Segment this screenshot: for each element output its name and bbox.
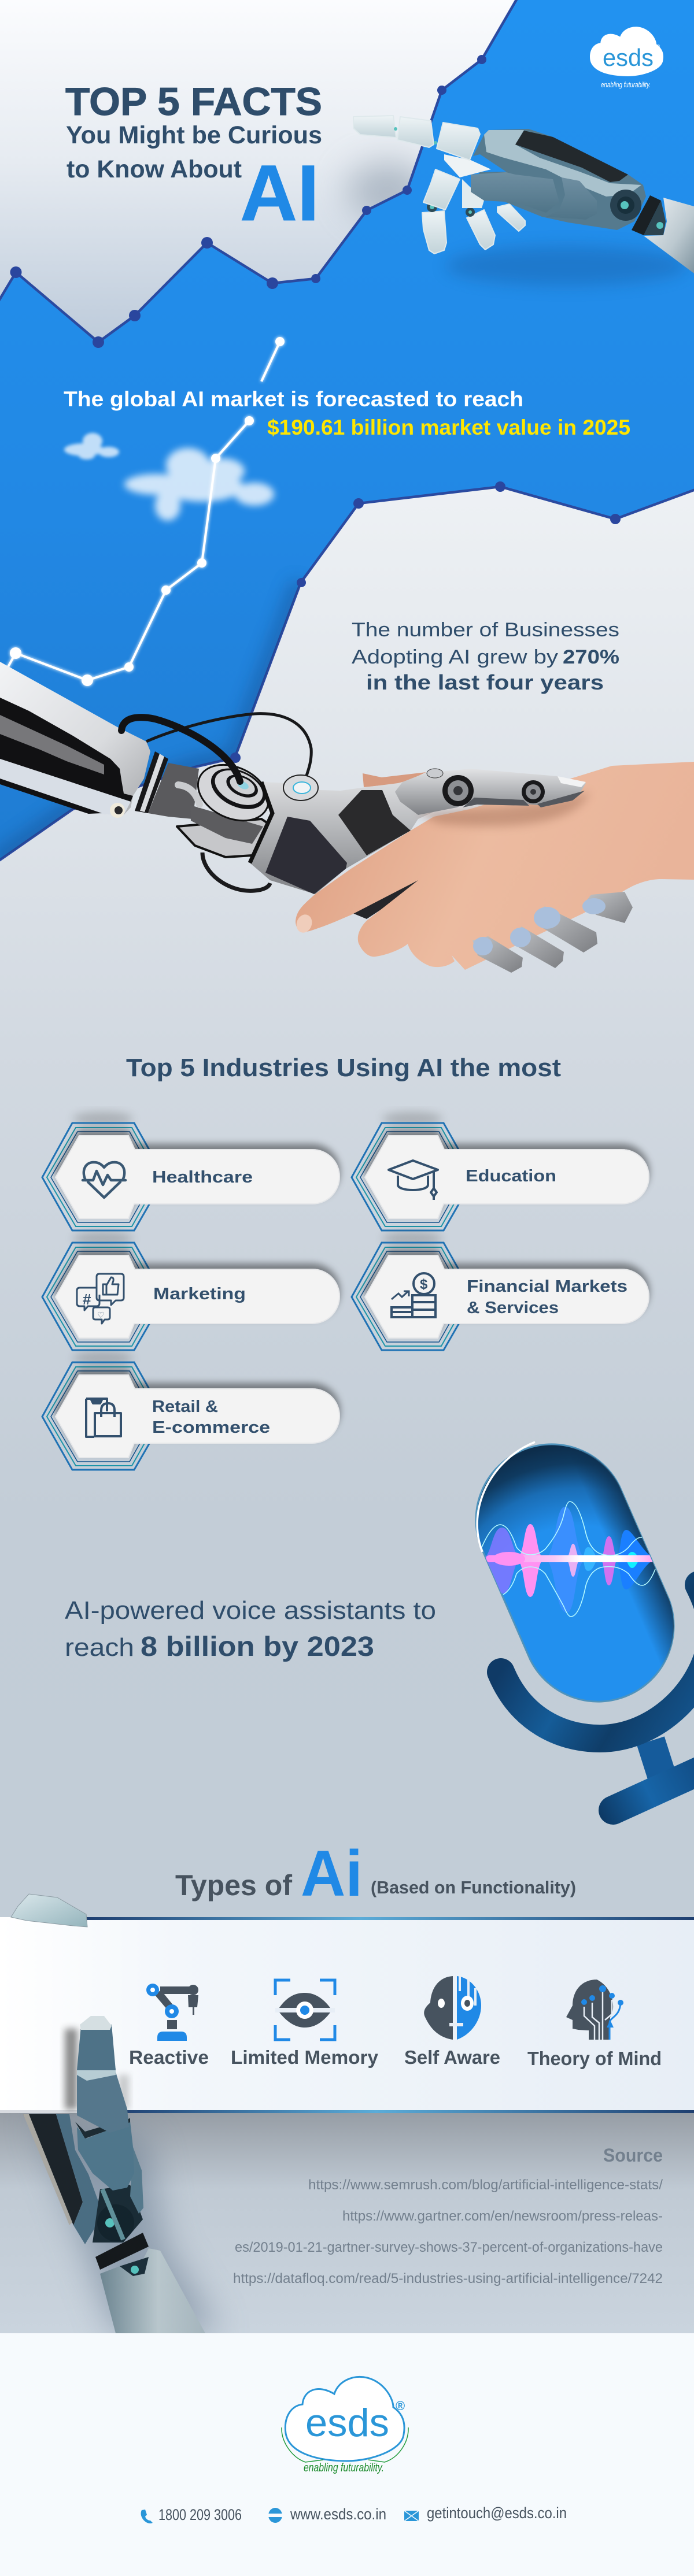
type: theory of mind bbox=[527, 1980, 662, 2069]
source list: https://www.gartner.com/en/newsroom/press-releas- bbox=[342, 2208, 663, 2224]
back plate bbox=[23, 2114, 83, 2225]
type: self aware: Self Aware bbox=[404, 2047, 500, 2068]
thin wire bbox=[146, 714, 311, 786]
ring and arm bbox=[100, 2248, 205, 2333]
mic stand bbox=[501, 1585, 694, 1810]
heading: types of AI: Ai bbox=[301, 1837, 363, 1910]
illustration: robot and human handshake bbox=[0, 662, 694, 973]
heading: types of AI: (Based on Functionality) bbox=[371, 1877, 576, 1897]
elbow joint rings bbox=[135, 751, 168, 813]
voice assistants text: 8 billion by 2023 bbox=[141, 1632, 374, 1662]
title: to Know About bbox=[67, 155, 242, 183]
logo: esds top right bbox=[590, 27, 663, 89]
heading: top 5 industries: Top 5 Industries Using AI the most bbox=[126, 1054, 561, 1082]
card: retail and e-commerce bbox=[42, 1351, 339, 1470]
icon: clouds bbox=[64, 433, 274, 521]
type: reactive bbox=[129, 1984, 209, 2068]
wrist bbox=[93, 2185, 143, 2243]
robot forearm bbox=[250, 774, 440, 894]
card: financial markets: Financial Markets bbox=[467, 1277, 627, 1296]
logo: esds footer bbox=[282, 2377, 408, 2474]
card: marketing: # bbox=[83, 1291, 91, 1308]
robot upper arm bbox=[0, 662, 150, 815]
human hand bbox=[296, 762, 694, 970]
contact row: 1800 209 3006 bbox=[158, 2506, 242, 2523]
type: theory of mind: Theory of Mind bbox=[527, 2048, 662, 2069]
illustration: pointing robot hand bbox=[353, 116, 694, 273]
icon: heartbeat bbox=[83, 1162, 125, 1198]
businesses adopting AI text: in the last four years bbox=[366, 670, 604, 694]
icon: social bubbles bbox=[77, 1274, 124, 1324]
businesses adopting AI text: Adopting AI grew by bbox=[352, 646, 558, 668]
card: marketing: Marketing bbox=[153, 1285, 246, 1303]
source list: https://datafloq.com/read/5-industries-using-artificial-intelligence/7242 bbox=[233, 2271, 663, 2286]
market forecast text: The global AI market is forecasted to reach bbox=[64, 387, 523, 411]
logo: esds top right: ® bbox=[655, 43, 660, 50]
card: marketing bbox=[42, 1232, 339, 1350]
human thumb behind forearm bbox=[363, 772, 426, 787]
icon: eye scan bbox=[275, 1980, 335, 2040]
voice assistants text bbox=[65, 1596, 436, 1662]
icon: globe bbox=[268, 2508, 283, 2523]
source list: Source bbox=[603, 2145, 663, 2166]
card: marketing: ♡ bbox=[97, 1310, 105, 1319]
card: education bbox=[352, 1112, 649, 1230]
title bbox=[65, 80, 322, 238]
heading: types of AI bbox=[175, 1837, 576, 1910]
card: financial markets bbox=[352, 1232, 649, 1350]
card: healthcare bbox=[42, 1112, 339, 1230]
type: reactive: Reactive bbox=[129, 2047, 209, 2068]
businesses adopting AI text bbox=[352, 619, 619, 694]
logo: esds footer: ® bbox=[396, 2399, 405, 2413]
mic capsule bbox=[476, 1444, 674, 1702]
fingers bbox=[130, 2147, 143, 2214]
businesses adopting AI text: 270% bbox=[563, 646, 619, 668]
card: retail and e-commerce: E-commerce bbox=[152, 1418, 270, 1437]
icon: shopping bag on phone bbox=[86, 1399, 121, 1437]
card: education: Education bbox=[466, 1167, 556, 1185]
source list: https://www.semrush.com/blog/artificial-intelligence-stats/ bbox=[308, 2177, 663, 2193]
illustration: microphone bbox=[476, 1442, 694, 1810]
blue market chart shape bbox=[0, 0, 694, 862]
icon: robot arm bbox=[146, 1984, 198, 2041]
market forecast text bbox=[64, 387, 630, 439]
spiral joint bbox=[189, 754, 278, 832]
source list: es/2019-01-21-gartner-survey-shows-37-percent-of-organizations-have bbox=[235, 2240, 663, 2255]
chart dots bbox=[10, 55, 621, 763]
title: AI bbox=[240, 149, 319, 238]
type: self aware bbox=[404, 1976, 500, 2068]
card: financial markets: $ bbox=[420, 1277, 428, 1292]
white growth line chart bbox=[0, 337, 285, 688]
robot thumb bbox=[395, 769, 586, 815]
robot fingers bbox=[472, 892, 633, 973]
icon: phone bbox=[141, 2510, 153, 2523]
icon: head with circuits bbox=[566, 1980, 623, 2040]
voice assistants text: reach bbox=[65, 1633, 134, 1662]
contact row: getintouch@esds.co.in bbox=[427, 2504, 567, 2522]
voice assistants text: AI-powered voice assistants to bbox=[65, 1596, 436, 1625]
logo: esds top right: enabling futurability. bbox=[601, 80, 651, 89]
thick cable bbox=[121, 717, 240, 781]
icon: graduation cap bbox=[389, 1161, 438, 1200]
panel: types of AI band bbox=[0, 1917, 694, 2113]
logo: esds top right: esds bbox=[603, 44, 654, 71]
sound wave bbox=[482, 1502, 658, 1617]
type: limited memory bbox=[231, 1980, 379, 2068]
illustration: robot finger over band bbox=[11, 1894, 220, 2333]
heading: types of AI: Types of bbox=[175, 1869, 292, 1902]
icon: mail bbox=[404, 2511, 419, 2521]
icon: coins and growth bbox=[392, 1273, 435, 1317]
card: financial markets: & Services bbox=[467, 1299, 559, 1317]
lower joint bbox=[177, 819, 270, 857]
contact row bbox=[141, 2504, 567, 2523]
lower cable bbox=[202, 853, 270, 891]
title: TOP 5 FACTS bbox=[65, 80, 322, 124]
type: limited memory: Limited Memory bbox=[231, 2047, 379, 2068]
contact row: www.esds.co.in bbox=[290, 2505, 386, 2523]
card: retail and e-commerce: Retail & bbox=[152, 1398, 218, 1416]
card: healthcare: Healthcare bbox=[152, 1168, 253, 1187]
source list bbox=[233, 2145, 663, 2286]
logo: esds footer: enabling futurability. bbox=[304, 2462, 384, 2474]
market forecast text: $190.61 billion market value in 2025 bbox=[267, 416, 630, 439]
businesses adopting AI text: The number of Businesses bbox=[352, 619, 619, 641]
icon: half human half robot head bbox=[424, 1976, 481, 2040]
title: You Might be Curious bbox=[66, 121, 322, 149]
logo: esds footer: esds bbox=[305, 2401, 389, 2445]
